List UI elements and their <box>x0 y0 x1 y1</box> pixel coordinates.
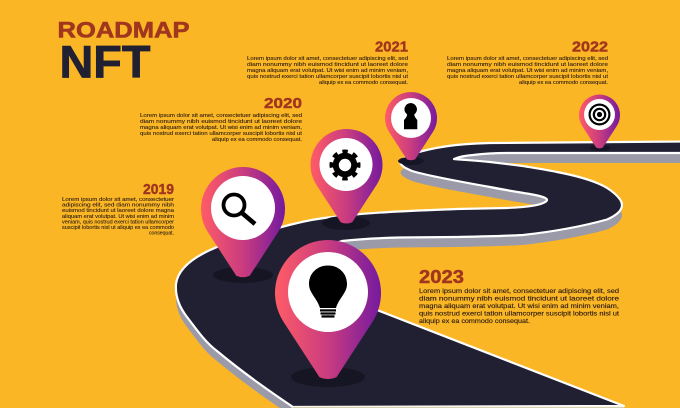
text block: 2023 <box>419 267 619 325</box>
text block: 2023: quis nostrud exerci tation ullamcorper suscipit lobortis nisl ut <box>419 310 619 318</box>
text block: 2021: quis nostrud exerci tation ullamcorper suscipit lobortis nisl ut <box>247 74 409 80</box>
text block: 2020: quis nostrud exerci tation ullamcorper suscipit lobortis nisl ut <box>140 131 303 137</box>
icon: light bulb <box>309 266 347 318</box>
text block: 2022: 2022 <box>572 39 608 56</box>
text block: 2020: aliquip ex ea commodo consequat. <box>212 137 302 143</box>
text block: 2023: aliquip ex ea commodo consequat. <box>419 318 530 325</box>
text block: 2021: aliquip ex ea commodo consequat. <box>319 80 408 86</box>
text block: 2022 <box>447 39 609 86</box>
text block: 2021: magna aliquam erat volutpat. Ut wisi enim ad minim veniam, <box>247 68 409 74</box>
text block: 2019: consequat. <box>149 231 174 237</box>
pin: 2020 gear <box>310 129 382 230</box>
text block: 2021: diam nonummy nibh euismod tincidunt ut laoreet dolore <box>247 62 408 68</box>
text block: 2022: magna aliquam erat volutpat. Ut wisi enim ad minim veniam, <box>447 68 609 74</box>
icon: person keyhole <box>404 103 417 129</box>
pin: 2023 light bulb <box>275 240 381 387</box>
text block: 2019: euismod tincidunt ut laoreet dolore magna <box>62 208 174 214</box>
text block: 2020: magna aliquam erat volutpat. Ut wisi enim ad minim veniam, <box>140 125 303 131</box>
text block: 2020: 2020 <box>264 95 302 112</box>
text block: 2022: diam nonummy nibh euismod tincidunt ut laoreet dolore <box>447 62 608 68</box>
text block: 2022: Lorem ipsum dolor sit amet, consectetuer adipiscing elit, sed <box>447 56 608 62</box>
pin: 2021 person <box>385 92 437 165</box>
text block: 2021 <box>247 39 409 86</box>
text block: 2020: diam nonummy nibh euismod tincidunt ut laoreet dolore <box>140 119 302 125</box>
icon: magnifier <box>224 194 255 224</box>
road <box>176 142 680 408</box>
text block: 2019: suscipit lobortis nisl ut aliquip ex ea commodo <box>62 225 174 231</box>
text block: 2019 <box>62 181 175 237</box>
text block: 2023: Lorem ipsum dolor sit amet, consectetuer adipiscing elit, sed <box>419 288 619 295</box>
pin: 2019 magnifier <box>201 167 285 283</box>
text block: 2023: 2023 <box>419 267 464 287</box>
text block: 2022: aliquip ex ea commodo consequat. <box>519 80 608 86</box>
text block: 2022: quis nostrud exerci tation ullamcorper suscipit lobortis nisl ut <box>447 74 609 80</box>
title: NFT <box>60 37 150 88</box>
title: ROADMAP <box>58 18 190 43</box>
text block: 2019: Lorem ipsum dolor sit amet, consectetuer <box>62 197 174 203</box>
text block: 2021: 2021 <box>375 39 408 56</box>
text block: 2019: aliquam erat volutpat. Ut wisi enim ad minim <box>62 214 175 220</box>
icon: target <box>588 104 610 126</box>
text block: 2019: veniam, quis nostrud exerci tation ullamcorper <box>62 220 174 226</box>
text block: 2019: adipiscing elit, sed diam nonummy nibh <box>62 203 174 209</box>
icon: gear <box>331 151 359 179</box>
text block: 2023: magna aliquam erat volutpat. Ut wisi enim ad minim veniam, <box>419 303 619 310</box>
title <box>58 18 190 88</box>
text block: 2021: Lorem ipsum dolor sit amet, consectetuer adipiscing elit, sed <box>247 56 408 62</box>
text block: 2019: 2019 <box>143 181 174 198</box>
text block: 2020: Lorem ipsum dolor sit amet, consectetuer adipiscing elit, sed <box>140 113 302 119</box>
text block: 2020 <box>140 95 303 143</box>
pin: 2022 target <box>579 95 620 151</box>
text block: 2023: diam nonummy nibh euismod tincidunt ut laoreet dolore <box>419 296 619 302</box>
